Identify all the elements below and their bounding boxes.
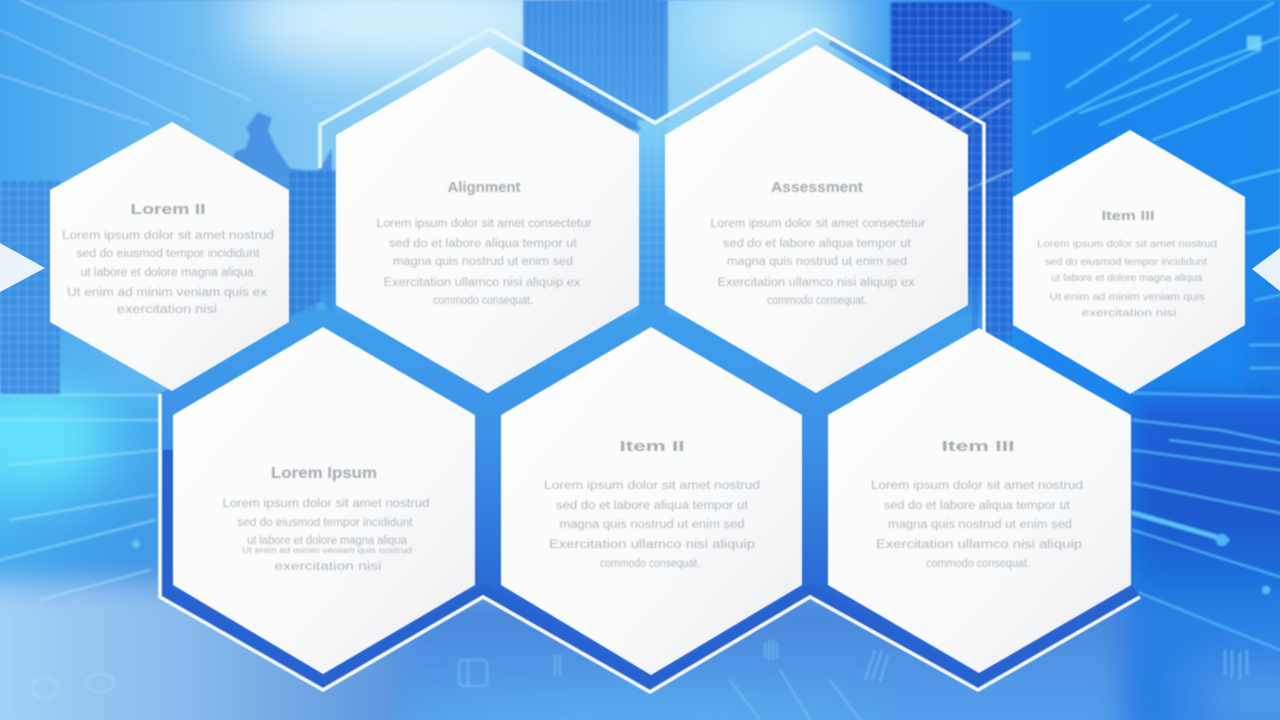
bottom tech marks (32, 640, 1247, 720)
hexagon panel 7 (828, 328, 1131, 673)
body text: Lorem ipsum dolor sit amet consectetur (710, 218, 926, 230)
body text: ut labore et dolore magna aliqua (80, 267, 254, 279)
body text: Lorem ipsum dolor sit amet nostrud (222, 498, 430, 510)
body text: exercitation nisi (274, 561, 382, 573)
body text: exercitation nisi (1082, 307, 1176, 319)
body text: Ut enim ad minim veniam quis ex (67, 287, 267, 299)
body text (871, 480, 1083, 570)
body text (62, 230, 274, 316)
soft colour regions of the background (0, 300, 1280, 720)
body text: magna quis nostrud ut enim sed (888, 519, 1072, 531)
body text: commodo consequat. (600, 558, 700, 570)
body text (710, 218, 926, 307)
body text: Lorem ipsum dolor sit amet nostrud (1037, 238, 1217, 250)
heading: Lorem II (130, 201, 206, 218)
hexagon panel 5 (173, 327, 475, 674)
body text: Exercitation ullamco nisi aliquip ex (718, 277, 915, 289)
city buildings (0, 0, 1012, 395)
body text: ut labore et dolore magna aliqua (1052, 272, 1203, 284)
body text: Exercitation ullamco nisi aliquip (549, 539, 755, 551)
hexagon panel 3 (665, 45, 968, 393)
body text: Lorem ipsum dolor sit amet nostrud (871, 480, 1083, 492)
heading: Item II (620, 438, 684, 455)
hexagon panel 1 (50, 122, 289, 391)
glow dots and small squares (132, 36, 1270, 594)
body text: magna quis nostrud ut enim sed (727, 256, 907, 268)
heading: Assessment (771, 179, 863, 196)
body text: exercitation nisi (117, 304, 217, 316)
body text: sed do eiusmod tempor incididunt (76, 248, 260, 260)
hexagon panel 4 (1013, 130, 1245, 394)
outer frame: top outline (320, 29, 984, 332)
heading: Item III (1102, 208, 1154, 223)
body text (1037, 238, 1217, 319)
heading: Item III (942, 438, 1014, 455)
heading: Lorem Ipsum (271, 465, 377, 482)
body text: sed do et labore aliqua tempor ut (723, 238, 912, 250)
frame interior band (160, 29, 1140, 692)
heading: Alignment (448, 179, 520, 196)
body text: Ut enim ad minim veniam quis nostrud (242, 546, 412, 555)
body text: sed do et labore aliqua tempor ut (389, 238, 578, 250)
body text: magna quis nostrud ut enim sed (560, 519, 744, 531)
hexagon panel 6 (501, 327, 802, 675)
body text: Exercitation ullamco nisi aliquip ex (384, 277, 581, 289)
body text: commodo consequat. (926, 558, 1030, 570)
body text: sed do et labore aliqua tempor ut (884, 500, 1071, 512)
body text: ut labore et dolore magna aliqua (247, 535, 408, 547)
arrow: left diamond (0, 243, 45, 292)
body text (222, 498, 430, 573)
hexagon panel 2 (336, 47, 639, 393)
body text: commodo consequat. (767, 295, 867, 307)
body text: sed do et labore aliqua tempor ut (556, 500, 749, 512)
body text (544, 480, 760, 570)
body text: magna quis nostrud ut enim sed (393, 256, 573, 268)
body text: Ut enim ad minim veniam quis (1050, 291, 1204, 303)
body text: commodo consequat. (433, 295, 533, 307)
body text: Lorem ipsum dolor sit amet nostrud (62, 230, 274, 242)
body text: sed do eiusmod tempor incididunt (1045, 256, 1207, 268)
body text: Exercitation ullamco nisi aliquip (876, 539, 1082, 551)
outer frame: bottom outline (160, 394, 1140, 692)
body text: Lorem ipsum dolor sit amet nostrud (544, 480, 760, 492)
body text (376, 218, 592, 307)
body text: Lorem ipsum dolor sit amet consectetur (376, 218, 592, 230)
body text: sed do eiusmod tempor incididunt (238, 517, 413, 529)
arrow: right diamond (1252, 248, 1280, 291)
